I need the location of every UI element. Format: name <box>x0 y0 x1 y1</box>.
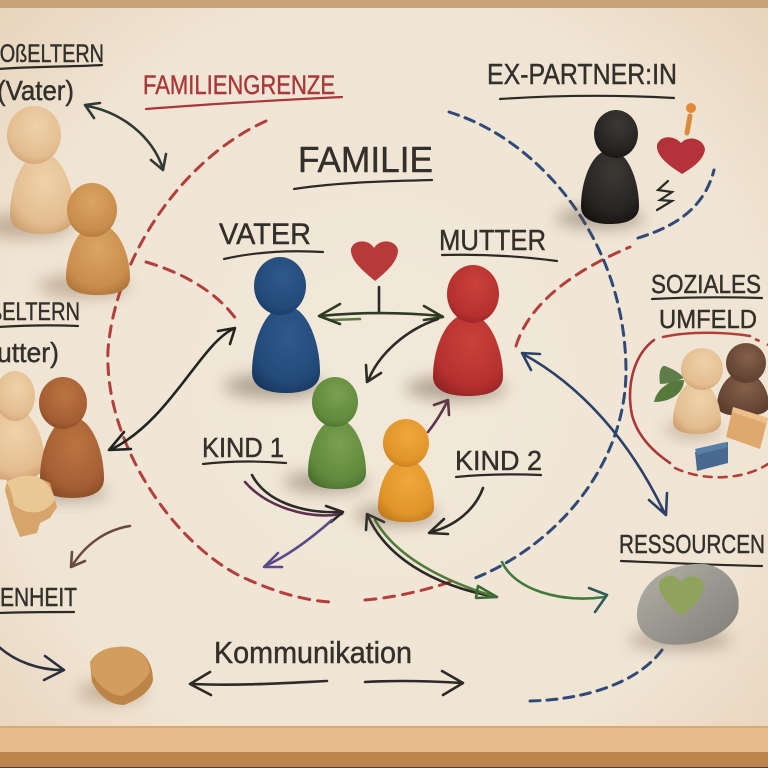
token: wooden puzzle piece <box>5 475 57 537</box>
arrow: communication left <box>190 672 327 695</box>
arrow: mother to children <box>366 319 438 382</box>
icon: wooden block <box>726 407 768 449</box>
arrow: Kind 1 to green child <box>245 475 343 567</box>
label: Soziales Umfeld: UMFELD <box>659 304 757 334</box>
arrow: orange child to mother <box>428 400 449 432</box>
figure: grandparent light <box>0 106 74 238</box>
label: Kind 2: KIND 2 <box>455 445 542 476</box>
figure: grandparent amber <box>38 183 130 297</box>
arrow: grandparents to boundary <box>85 103 166 170</box>
heading: Ex-Partner:in: EX-PARTNER:IN <box>487 59 677 91</box>
icon: resource stone with green heart <box>628 564 739 649</box>
heading: Familiengrenze <box>143 70 342 109</box>
label: Vater: VATER <box>219 218 311 251</box>
figure: father blue <box>224 257 324 398</box>
figure: child orange <box>354 419 438 525</box>
ex-partner boundary: blue dashed <box>449 112 714 701</box>
label: Großeltern (Mutter) <box>0 298 80 368</box>
figure: maternal grandparent light <box>0 371 45 480</box>
arrow: father to grandparents <box>109 328 235 450</box>
icon: green leaves <box>654 366 684 402</box>
heading: Großeltern (Vater) <box>0 40 104 106</box>
figure: mother red <box>406 265 506 400</box>
icon: broken heart with pin <box>657 103 705 210</box>
figure: child green <box>284 377 368 492</box>
icon: heart between parents <box>351 241 398 281</box>
label: Kommunikation: Kommunikation <box>214 635 412 670</box>
arrow: green to resources <box>502 562 607 612</box>
label: Soziales Umfeld <box>651 269 762 334</box>
family boundary: red dashed <box>108 121 630 602</box>
token: wooden stone <box>78 647 153 705</box>
heading: Familie: FAMILIE <box>298 139 433 180</box>
label: Mutter: MUTTER <box>439 225 546 257</box>
group: social environment <box>630 333 768 477</box>
arrow: Kind 2 to orange child <box>429 488 483 534</box>
figure: ex-partner black <box>556 110 644 228</box>
figure: brown peer <box>717 343 768 416</box>
label: Kind 1: KIND 1 <box>202 432 284 463</box>
arrow: communication right <box>365 671 463 695</box>
arrow: to wooden token <box>0 646 64 680</box>
arrow: children to outside <box>366 514 497 598</box>
heading: Familiengrenze: FAMILIENGRENZE <box>143 70 335 100</box>
arrow: past generation <box>71 526 130 567</box>
arrow: father and mother link <box>319 287 443 324</box>
figure: beige peer <box>664 348 723 437</box>
icon: blue block <box>695 442 728 471</box>
arrow: mother to resources <box>522 353 667 515</box>
figure: maternal grandparent brown <box>24 377 108 501</box>
